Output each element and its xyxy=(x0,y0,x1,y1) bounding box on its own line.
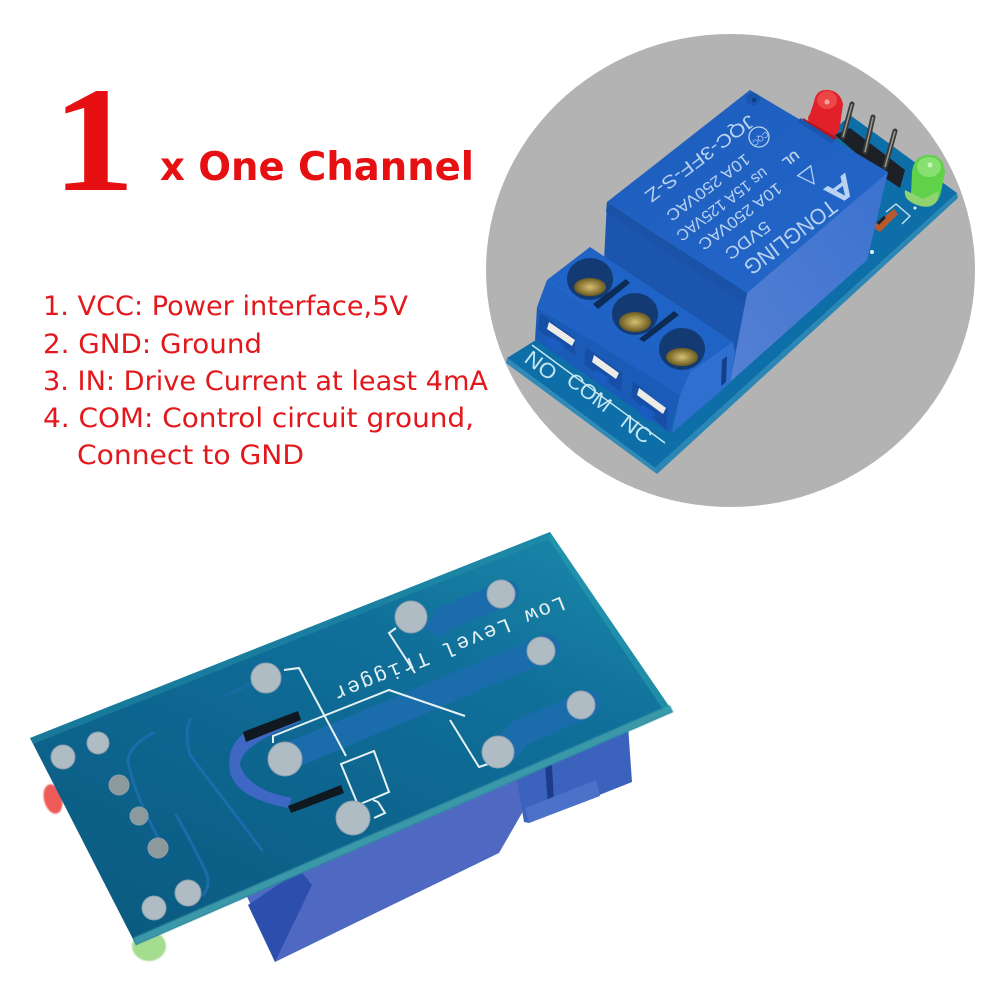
numeral 1: 1 xyxy=(52,57,135,223)
relay printed markings: △ xyxy=(794,162,826,196)
pin description list xyxy=(43,291,489,471)
diode xyxy=(870,204,916,254)
relay module photo, solder side xyxy=(30,532,673,962)
terminal screws xyxy=(567,258,613,300)
relay module photo, top view xyxy=(506,90,958,474)
screw terminal block xyxy=(535,247,735,433)
pin description list: Connect to GND xyxy=(77,440,304,471)
relay printed markings: UL xyxy=(779,148,802,170)
relay printed markings: 5VDC xyxy=(721,217,774,263)
terminal slots xyxy=(593,279,630,309)
relay printed markings: A xyxy=(818,166,863,213)
relay printed markings: us 15A 125VAC xyxy=(673,164,771,244)
relay front side xyxy=(603,202,747,382)
relay right side xyxy=(730,172,888,382)
grey circle backdrop xyxy=(486,34,975,507)
relay printed markings: CQC xyxy=(750,129,770,147)
pin description list: 3. IN: Drive Current at least 4mA xyxy=(43,366,489,397)
top PCB xyxy=(507,115,957,468)
PCB slot cutout xyxy=(229,711,344,813)
relay printed markings xyxy=(641,111,863,280)
red LED xyxy=(800,90,843,143)
red LED back xyxy=(40,782,66,816)
solder pads xyxy=(51,580,595,920)
relay printed markings: 10A 250VAC xyxy=(695,179,785,253)
pin description list: 2. GND: Ground xyxy=(43,329,262,360)
green LED xyxy=(905,155,945,207)
pin description list: 4. COM: Control circuit ground, xyxy=(43,403,474,434)
header pins xyxy=(835,104,905,188)
PCB terminal labels: NO xyxy=(520,347,561,385)
silkscreen symbols xyxy=(273,628,488,818)
pin description list: 1. VCC: Power interface,5V xyxy=(43,291,409,322)
PCB terminal labels: COM xyxy=(562,369,616,417)
relay printed markings: JQC-3FF-S-Z xyxy=(641,111,759,206)
relay housing xyxy=(240,760,530,962)
relay printed markings: TONGLING xyxy=(739,194,842,280)
title: x One Channel: x One Channel xyxy=(160,145,474,190)
copper traces xyxy=(128,593,587,895)
terminal openings xyxy=(538,313,575,355)
terminal block back xyxy=(515,725,632,823)
silkscreen text: Low Level Trigger xyxy=(329,590,568,704)
green LED back xyxy=(132,931,166,961)
PCB terminal labels: NC xyxy=(616,411,656,449)
relay printed markings: 10A 250VAC xyxy=(663,150,753,224)
solder side PCB xyxy=(30,532,673,945)
PCB terminal labels xyxy=(520,345,665,449)
relay top face xyxy=(607,90,888,293)
